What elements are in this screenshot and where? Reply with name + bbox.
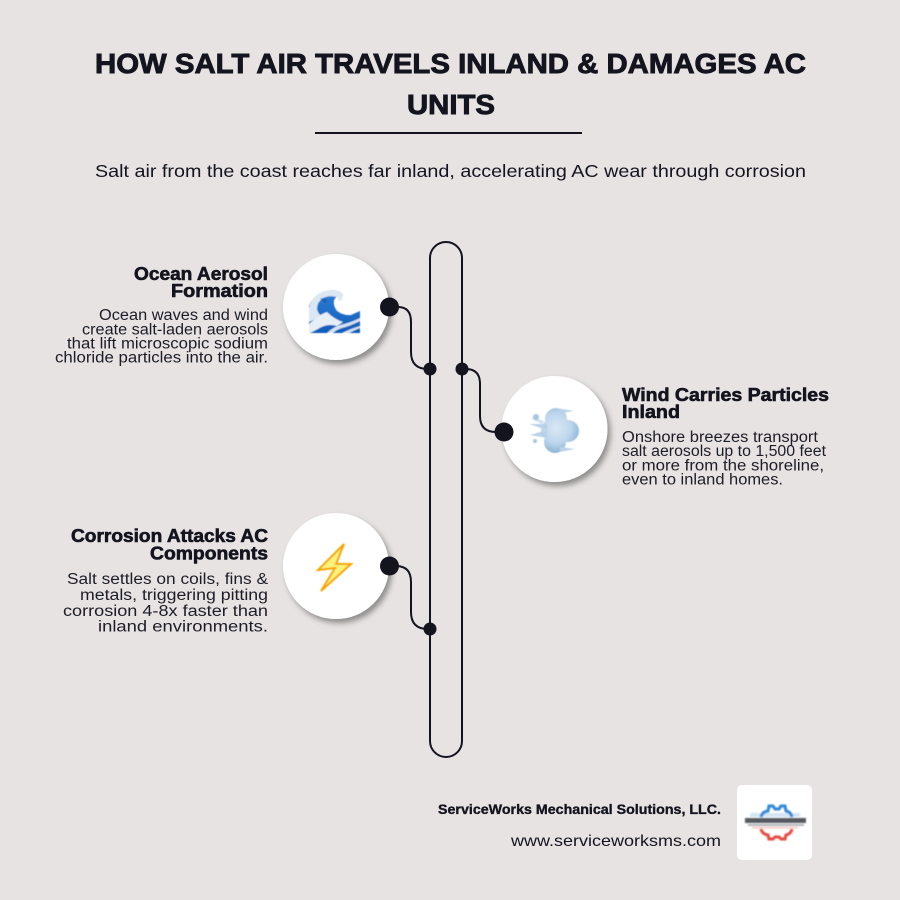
subtitle: Salt air from the coast reaches far inland, accelerating AC wear through corrosion: [95, 161, 806, 181]
dot: ocean aerosol node: [380, 298, 399, 316]
heading: ocean aerosol formation: Formation: [171, 281, 268, 301]
title: HOW SALT AIR TRAVELS INLAND & DAMAGES AC: [95, 48, 806, 79]
body: corrosion attacks ac components: metals, triggering pitting: [80, 587, 268, 604]
body: ocean aerosol formation: create salt-laden aerosols: [82, 322, 268, 338]
body: wind carries particles inland: [622, 429, 827, 488]
icon: lightning bolt in circle: [283, 513, 389, 619]
connector: corrosion to pipeline: [389, 566, 436, 636]
heading: wind carries particles inland: [622, 385, 829, 422]
central capsule pipeline: [430, 242, 462, 757]
heading: corrosion attacks ac components: [71, 526, 268, 564]
body: corrosion attacks ac components: inland environments.: [98, 618, 268, 636]
connector: ocean aerosol to pipeline: [389, 307, 436, 376]
connector: wind to pipeline: [456, 362, 504, 432]
footer website: www.serviceworksms.com: [510, 833, 721, 850]
body: wind carries particles inland: Onshore breezes transport: [622, 429, 819, 446]
footer company name: ServiceWorks Mechanical Solutions, LLC.: [438, 802, 721, 817]
heading: wind carries particles inland: Inland: [622, 402, 680, 422]
logo: [737, 785, 812, 860]
body: wind carries particles inland: even to inland homes.: [622, 472, 783, 488]
body: corrosion attacks ac components: corrosion 4-8x faster than: [63, 603, 268, 620]
body: corrosion attacks ac components: [63, 571, 269, 636]
heading: ocean aerosol formation: Ocean Aerosol: [134, 264, 268, 284]
heading: ocean aerosol formation: [134, 264, 268, 301]
body: wind carries particles inland: salt aerosols up to 1,500 feet: [622, 443, 827, 460]
body: wind carries particles inland: or more from the shoreline,: [622, 458, 824, 474]
dot: wind node: [494, 422, 514, 442]
body: corrosion attacks ac components: Salt settles on coils, fins &: [67, 571, 269, 588]
title: UNITS: [407, 89, 495, 120]
icon: ocean wave in circle: [283, 254, 389, 360]
panel: corrosion attacks text: [63, 526, 269, 636]
heading: wind carries particles inland: Wind Carries Particles: [622, 385, 829, 405]
title underline: [315, 132, 582, 134]
icon: wind gust in circle: [502, 376, 608, 482]
panel: wind carries particles text: [622, 385, 829, 488]
heading: corrosion attacks ac components: Corrosion Attacks AC: [71, 526, 268, 546]
panel: ocean aerosol formation text: [55, 264, 268, 366]
body: ocean aerosol formation: Ocean waves and wind: [99, 307, 268, 324]
body: ocean aerosol formation: [55, 307, 268, 366]
body: ocean aerosol formation: chloride particles into the air.: [55, 350, 268, 366]
dot: corrosion node: [380, 556, 399, 576]
body: ocean aerosol formation: that lift microscopic sodium: [67, 336, 268, 352]
heading: corrosion attacks ac components: Components: [150, 544, 268, 564]
title: [95, 48, 806, 120]
